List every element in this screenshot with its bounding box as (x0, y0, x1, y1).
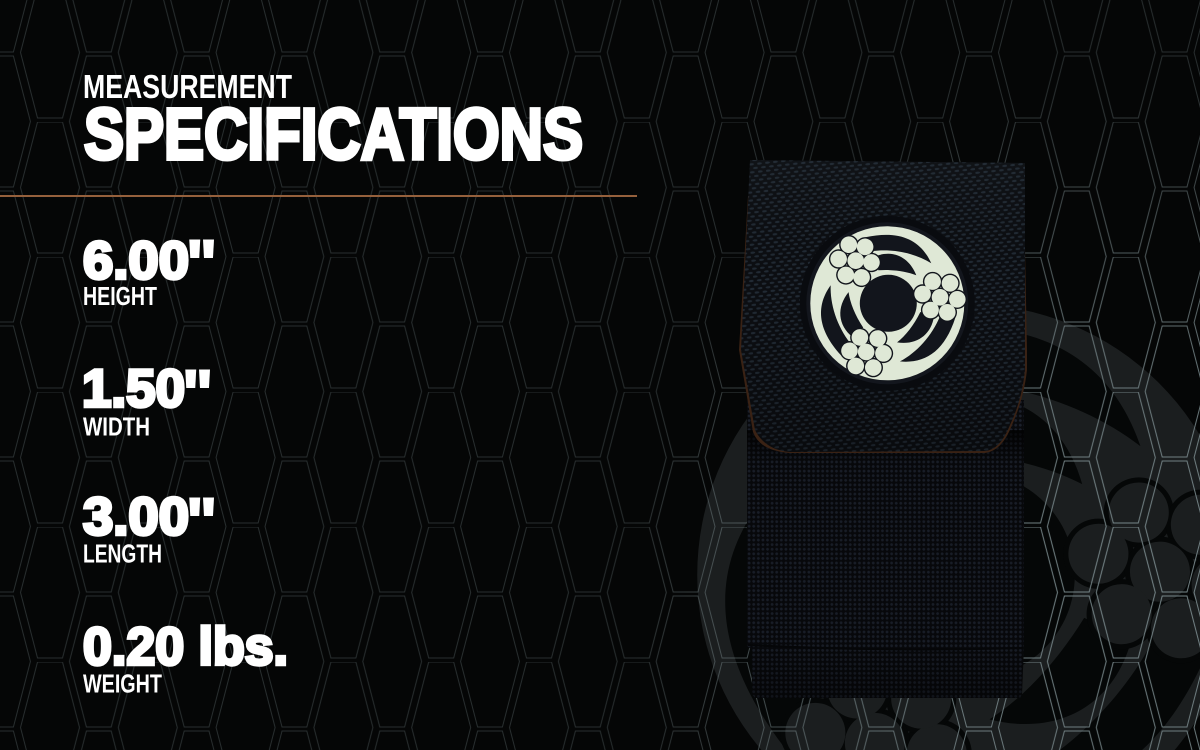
value: 3.00: 3.00 (83, 488, 189, 546)
value: 1.50 (82, 356, 213, 430)
value: 3.00 (83, 484, 217, 558)
title line: specifications: SPECIFICATIONS (84, 95, 583, 175)
value: 0.20 lbs: 0.20 lbs. (83, 618, 288, 676)
spec: weight (83, 618, 288, 698)
divider line (0, 195, 637, 197)
badge logo (800, 216, 975, 391)
label: length: LENGTH (83, 540, 162, 568)
title (83, 69, 583, 175)
label: width: WIDTH (83, 414, 150, 442)
spec: width (82, 356, 213, 442)
value: 1.50: " (182, 356, 213, 430)
label: height: HEIGHT (83, 283, 157, 311)
spec: length (83, 484, 217, 568)
pouch flap (739, 160, 1027, 453)
value: 6.00: 6.00 (83, 232, 189, 290)
value: 3.00: " (186, 484, 217, 558)
label: weight: WEIGHT (83, 670, 162, 698)
value: 1.50: 1.50 (82, 360, 185, 418)
pouch (739, 160, 1027, 698)
pouch body (747, 400, 1024, 698)
value: 6.00: " (186, 226, 217, 300)
title line: measurement: MEASUREMENT (83, 69, 292, 106)
spec: height (83, 226, 217, 311)
value: 6.00 (83, 226, 217, 300)
watermark logo (697, 310, 1200, 750)
